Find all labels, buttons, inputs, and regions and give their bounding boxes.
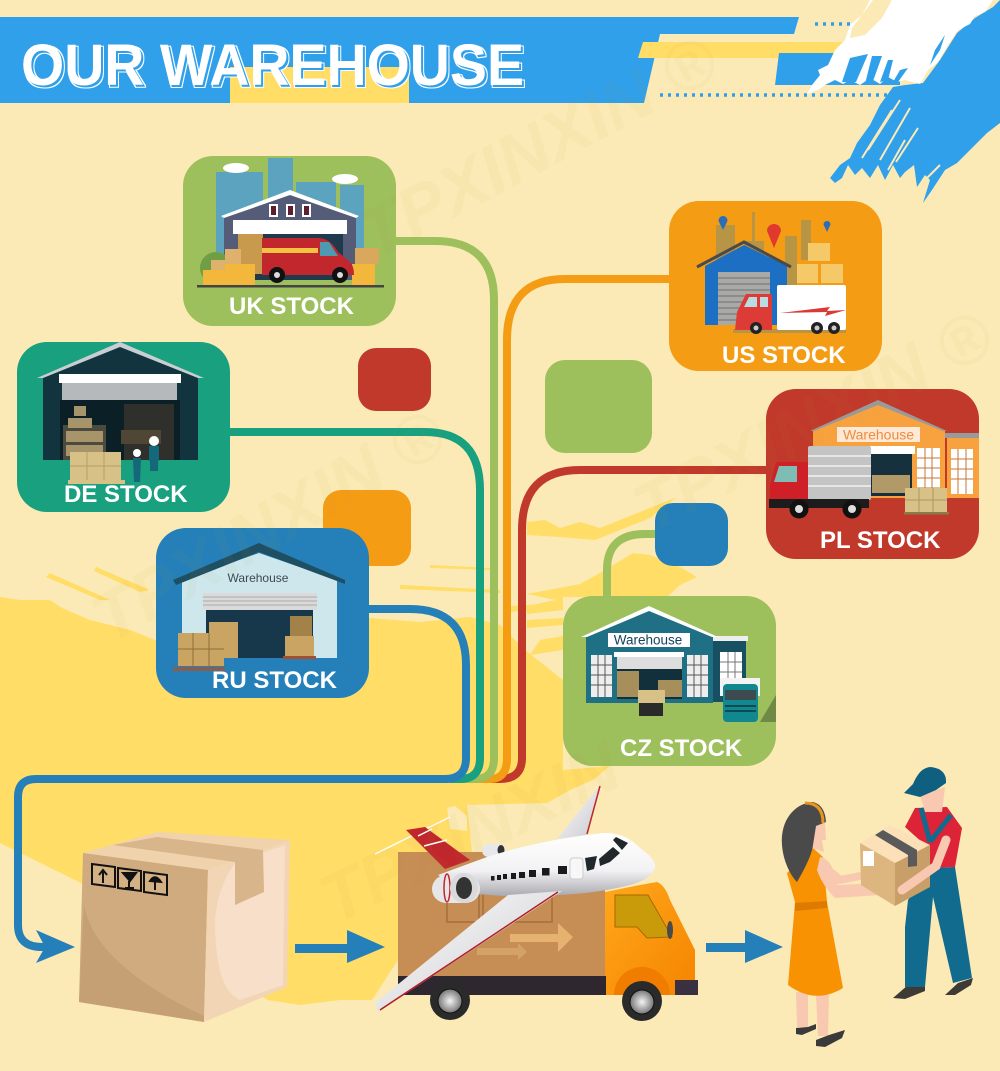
panel: CZ stock <box>563 596 776 766</box>
warehouse building <box>810 400 979 498</box>
watermark: TPXINXIN ® <box>78 393 459 658</box>
line: CZ to blue square <box>607 534 660 600</box>
workers <box>133 436 159 482</box>
watermark: TPXINXIN ® <box>345 19 730 273</box>
dress <box>787 848 843 996</box>
far engine <box>482 844 506 857</box>
wheel arch <box>614 967 670 995</box>
shoes <box>796 1024 845 1047</box>
hair <box>782 802 826 882</box>
dotted lines <box>660 24 918 95</box>
shoes <box>893 978 973 999</box>
cream streaks <box>862 100 940 180</box>
parcel tape <box>875 830 917 867</box>
warehouse building <box>221 190 359 280</box>
location pins <box>718 216 830 248</box>
warehouse building <box>697 242 791 325</box>
building sign: Warehouse <box>228 571 289 585</box>
decorative square: red <box>358 348 431 411</box>
second arm <box>832 873 860 880</box>
cardboard boxes <box>200 234 379 286</box>
fuselage <box>438 833 655 896</box>
tail fin <box>406 827 470 869</box>
overall straps <box>921 808 951 842</box>
icon: airplane <box>375 785 655 1012</box>
blue streaks through white <box>842 35 945 84</box>
cap <box>904 767 946 797</box>
face <box>920 787 945 812</box>
cream patch <box>850 0 892 38</box>
label: UK STOCK <box>229 293 355 320</box>
ground <box>733 329 846 333</box>
watermark <box>78 19 1000 938</box>
main wing <box>375 891 562 1012</box>
mirror <box>667 921 673 939</box>
parcel <box>860 825 930 906</box>
cabin windows <box>491 866 567 880</box>
panel: PL stock <box>766 389 979 559</box>
cargo printed arrows <box>510 923 573 952</box>
man <box>860 767 973 999</box>
belt <box>795 901 827 911</box>
front arm <box>817 857 890 898</box>
building sign: Warehouse <box>843 426 914 442</box>
tail antenna <box>375 817 450 854</box>
connector lines <box>18 241 766 947</box>
clouds <box>223 163 358 184</box>
icon: delivery truck <box>398 852 698 1021</box>
pallet of boxes <box>68 452 125 484</box>
line: UK to route <box>396 241 494 779</box>
arrow: truck to customer <box>706 930 783 963</box>
shelves with boxes <box>63 404 174 460</box>
headband <box>805 803 823 823</box>
cabin door <box>570 858 583 879</box>
watermark: TPXINXIN <box>307 726 633 938</box>
near engine <box>432 873 480 903</box>
truck <box>735 285 846 334</box>
label: US STOCK <box>722 342 846 369</box>
decorative square: blue <box>655 503 728 566</box>
courier arm <box>902 840 946 890</box>
panel: US stock <box>669 201 882 371</box>
cream patch on blob <box>447 806 467 831</box>
building sign: Warehouse <box>614 632 682 648</box>
panel: DE stock <box>17 342 230 512</box>
label: RU STOCK <box>212 667 338 694</box>
brush stroke: blue <box>830 0 1000 203</box>
warehouse building <box>173 543 345 658</box>
banner bar <box>0 17 799 103</box>
stacked boxes <box>173 616 316 671</box>
illustration: customer and courier <box>782 767 973 1047</box>
pants <box>905 867 972 987</box>
handling symbols <box>92 864 167 895</box>
brush stroke: white <box>807 0 993 94</box>
decorative square: green <box>545 360 652 453</box>
chassis <box>398 976 606 995</box>
line: US to route <box>470 279 669 779</box>
cargo handling marks <box>447 893 552 922</box>
wheels <box>430 980 662 1021</box>
label: PL STOCK <box>820 527 941 554</box>
warehouse building <box>581 606 748 703</box>
line: RU to box <box>18 609 466 947</box>
stacked parcels <box>797 243 843 283</box>
truck <box>720 678 776 722</box>
shirt <box>905 807 962 868</box>
banner yellow block <box>230 67 409 103</box>
pallet boxes <box>904 488 949 514</box>
arrow: box to truck <box>295 930 385 963</box>
cargo container <box>398 852 605 977</box>
panel: UK stock <box>183 156 396 326</box>
line: PL to route <box>470 470 766 779</box>
warehouse building <box>37 342 204 460</box>
title text: OUR WAREHOUSE <box>21 33 524 98</box>
woman <box>782 802 890 1047</box>
forklift with boxes <box>638 690 665 716</box>
line: DE to route <box>230 432 480 779</box>
parcel label <box>863 851 874 866</box>
panel: RU stock <box>156 528 369 698</box>
cab <box>605 882 695 995</box>
icon: cardboard box <box>79 832 290 1022</box>
neck and face <box>812 820 826 852</box>
legs <box>796 992 829 1036</box>
decorative square: orange <box>323 490 411 566</box>
banner yellow stripe <box>638 42 850 58</box>
delivery truck <box>769 446 871 518</box>
arrow: into box <box>36 930 75 963</box>
red van <box>262 238 354 283</box>
ground line <box>197 285 384 288</box>
watermark: TPXINXIN ® <box>620 294 1000 548</box>
cockpit glass <box>585 837 628 871</box>
yellow paint blob <box>0 497 697 1005</box>
title banner <box>0 0 1000 203</box>
label: DE STOCK <box>64 481 188 508</box>
city skyline <box>216 158 364 265</box>
packing tape <box>113 837 264 905</box>
top wing <box>557 785 600 839</box>
tan skyline <box>716 212 811 286</box>
banner blue block <box>775 53 900 85</box>
label: CZ STOCK <box>620 735 743 762</box>
